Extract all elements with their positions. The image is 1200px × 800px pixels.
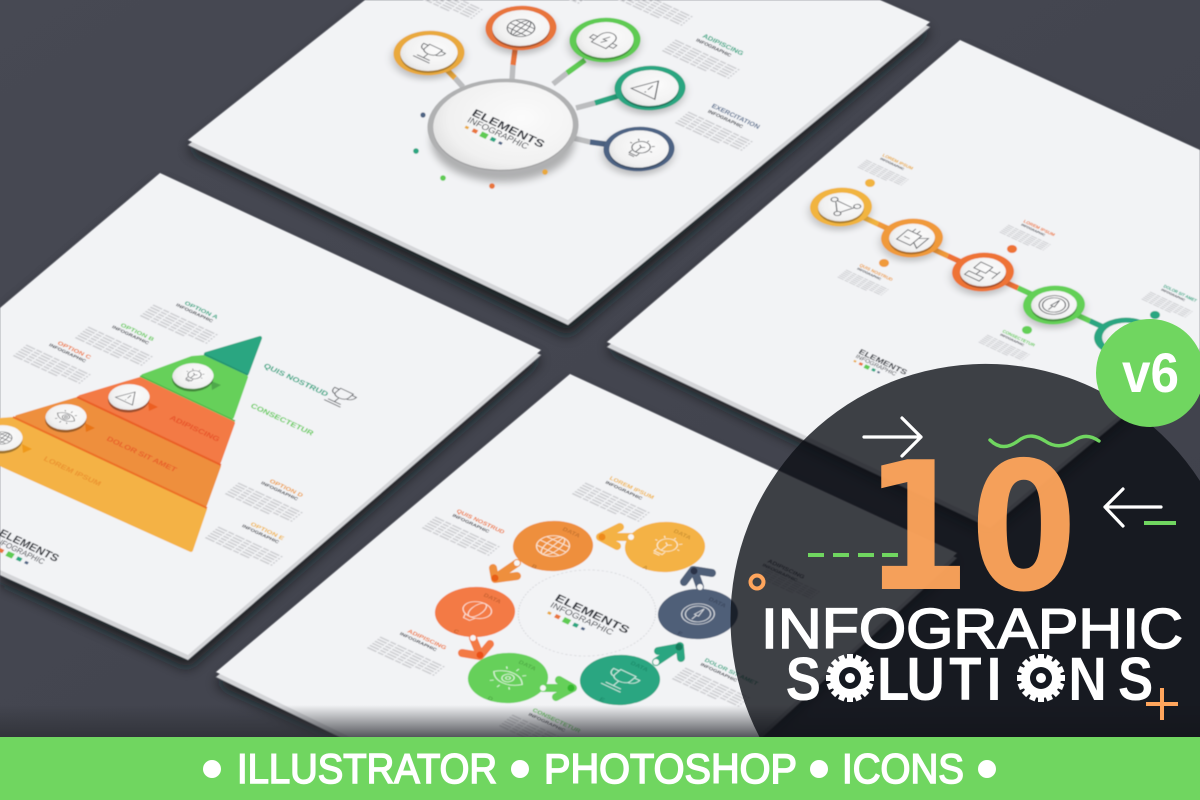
cycle arrows bbox=[462, 527, 712, 697]
timeline node 2 bbox=[865, 211, 958, 269]
blob data captions: DATA bbox=[561, 526, 582, 539]
blob data captions: F bbox=[676, 630, 684, 637]
label: adipiscing: INFOGRAPHIC bbox=[695, 38, 732, 58]
cycle blob green eye bbox=[452, 643, 564, 713]
arrow: right white bbox=[864, 418, 921, 456]
pyramid disc eye bbox=[35, 399, 97, 438]
cycle labels: INFOGRAPHIC bbox=[699, 662, 739, 684]
timeline labels bbox=[856, 153, 1198, 351]
dark translucent circle bbox=[730, 364, 1200, 737]
cycle blob orange globe bbox=[497, 511, 609, 581]
hub circle bbox=[397, 60, 609, 192]
blob data captions: E bbox=[598, 696, 606, 703]
timeline node 3 bbox=[936, 245, 1029, 303]
pyramid tier labels: DOLOR SIT AMET bbox=[105, 435, 178, 474]
hub logo: ELEMENTS bbox=[470, 107, 547, 150]
icon: gear O right bbox=[1017, 654, 1065, 702]
panel: pyramid sheet bbox=[0, 173, 541, 668]
description text blocks bbox=[405, 0, 752, 152]
footer band: ICONS bbox=[842, 745, 964, 792]
pyramid bbox=[0, 338, 260, 550]
blob data captions bbox=[452, 526, 728, 703]
accent: green wave bbox=[990, 436, 1099, 447]
blob data captions: DATA bbox=[672, 528, 693, 541]
timeline labels: QUIS NOSTRUD bbox=[858, 263, 894, 283]
accent: green dash bbox=[1144, 521, 1176, 525]
footer bullets bbox=[203, 760, 996, 778]
cycle logo bbox=[545, 592, 632, 647]
timeline node 1 bbox=[794, 180, 887, 238]
footer band bbox=[0, 737, 1200, 800]
footer band: PHOTOSHOP bbox=[544, 745, 797, 792]
connectors bbox=[447, 50, 618, 145]
option labels: OPTION B bbox=[119, 322, 156, 343]
blob data captions: DATA bbox=[517, 659, 538, 672]
cycle labels: ADIPISCING bbox=[406, 628, 448, 651]
icon: trophy bbox=[321, 386, 358, 408]
panel: radial hub sheet bbox=[188, 0, 930, 336]
cycle blob navy compass bbox=[642, 579, 754, 649]
label: exercitation: EXERCITATION bbox=[710, 102, 762, 130]
timeline logo: ELEMENTS bbox=[857, 347, 909, 377]
cycle logo: ELEMENTS bbox=[553, 592, 632, 636]
footer band: ILLUSTRATOR bbox=[237, 745, 497, 792]
timeline labels: CONSECTETUR bbox=[1001, 329, 1036, 348]
cycle labels: INFOGRAPHIC bbox=[398, 632, 438, 653]
option labels: INFOGRAPHIC bbox=[260, 481, 299, 502]
hub logo: INFOGRAPHIC bbox=[465, 116, 530, 152]
pyramid tier labels: CONSECTETUR bbox=[249, 402, 315, 437]
option labels: OPTION A bbox=[183, 300, 220, 321]
blob data captions: C bbox=[452, 628, 461, 636]
blob data captions: DATA bbox=[482, 592, 503, 605]
cycle labels: INFOGRAPHIC bbox=[761, 563, 799, 583]
timeline text blocks bbox=[838, 160, 1192, 362]
pyramid tier labels: ADIPISCING bbox=[168, 414, 221, 443]
accent: green dashed line bbox=[808, 553, 898, 557]
satellite green helmet bbox=[552, 9, 658, 75]
icon: gear O left bbox=[826, 654, 874, 702]
timeline labels: INFOGRAPHIC bbox=[856, 267, 882, 281]
timeline labels: LOREM IPSUM bbox=[1022, 219, 1056, 238]
timeline labels: INFOGRAPHIC bbox=[1020, 223, 1046, 237]
hub dots bbox=[413, 112, 548, 189]
arrow dark tips bbox=[476, 534, 698, 692]
cycle labels: INFOGRAPHIC bbox=[451, 513, 491, 535]
timeline dots bbox=[865, 179, 1160, 334]
cycle labels: QUIS NOSTRUD bbox=[455, 508, 506, 536]
panel: timeline sheet bbox=[607, 40, 1200, 535]
arrow: left white bbox=[1105, 489, 1161, 526]
heading: infographic: INFOGRAPHIC bbox=[761, 597, 1183, 661]
option labels: OPTION C bbox=[56, 340, 93, 361]
blob data captions: B bbox=[530, 563, 539, 571]
cycle labels: ADIPISCING bbox=[766, 558, 806, 580]
timeline labels: INFOGRAPHIC bbox=[1160, 288, 1186, 302]
number 10: 10 bbox=[864, 425, 1077, 632]
satellite yellow trophy bbox=[376, 22, 482, 88]
arrow start dots bbox=[470, 534, 703, 691]
cycle labels bbox=[398, 475, 806, 739]
cycle labels: CONSECTETUR bbox=[531, 707, 582, 735]
accent: orange ring bbox=[750, 576, 764, 588]
blob data captions: D bbox=[486, 695, 495, 703]
timeline connector bbox=[841, 207, 1125, 337]
timeline logo: INFOGRAPHIC bbox=[854, 354, 898, 377]
label: exercitation: INFOGRAPHIC bbox=[706, 109, 744, 130]
bottom fade shadow bbox=[0, 705, 1200, 737]
blob data captions: DATA bbox=[629, 660, 650, 673]
timeline labels: INFOGRAPHIC bbox=[999, 333, 1025, 347]
cycle blob teal trophy bbox=[564, 645, 676, 715]
cycle labels: INFOGRAPHIC bbox=[604, 480, 644, 502]
pyramid tier labels: LOREM IPSUM bbox=[42, 455, 103, 488]
timeline node 5 bbox=[1082, 310, 1168, 364]
option labels: INFOGRAPHIC bbox=[48, 343, 87, 364]
cycle text blocks bbox=[367, 483, 819, 755]
option labels: OPTION D bbox=[268, 478, 305, 499]
panel: cycle sheet bbox=[216, 374, 957, 755]
pyramid tier labels: QUIS NOSTRUD bbox=[262, 362, 330, 398]
satellite orange globe bbox=[468, 0, 574, 63]
pyramid tier labels bbox=[42, 362, 330, 488]
label: adipiscing: ADIPISCING bbox=[701, 32, 746, 57]
option labels: OPTION E bbox=[249, 521, 285, 542]
option labels: INFOGRAPHIC bbox=[111, 325, 150, 346]
blob data captions: DATA bbox=[707, 596, 728, 609]
pyramid text blocks bbox=[13, 305, 302, 567]
pyramid disc warning bbox=[98, 379, 160, 418]
timeline node 4 bbox=[1007, 278, 1100, 336]
cycle labels: LOREM IPSUM bbox=[608, 475, 655, 501]
timeline labels: INFOGRAPHIC bbox=[879, 157, 905, 171]
pyramid white discs bbox=[162, 358, 224, 397]
pyramid small triangles bbox=[22, 381, 221, 453]
badge: v6: v6 bbox=[1122, 341, 1179, 404]
cycle blob yellow bulb bbox=[609, 512, 721, 582]
pyramid disc globe bbox=[0, 420, 33, 459]
dashed centre ring bbox=[491, 553, 683, 673]
satellite navy bulb bbox=[586, 118, 692, 184]
option labels: INFOGRAPHIC bbox=[241, 524, 280, 545]
cycle labels: INFOGRAPHIC bbox=[527, 712, 567, 734]
cycle blob coral balloon bbox=[419, 577, 531, 647]
option labels: INFOGRAPHIC bbox=[175, 303, 214, 324]
heading: solutions: SOLUTIONS bbox=[786, 646, 1153, 714]
badge: v6 bbox=[1096, 319, 1200, 427]
satellite teal warning bbox=[597, 57, 703, 123]
cycle logo: INFOGRAPHIC bbox=[548, 601, 615, 638]
cycle labels: DOLOR SIT AMET bbox=[703, 657, 759, 687]
accent: orange plus bbox=[1146, 688, 1178, 720]
blob data captions: A bbox=[641, 564, 650, 572]
timeline labels: LOREM IPSUM bbox=[881, 153, 914, 171]
option labels bbox=[48, 298, 305, 546]
